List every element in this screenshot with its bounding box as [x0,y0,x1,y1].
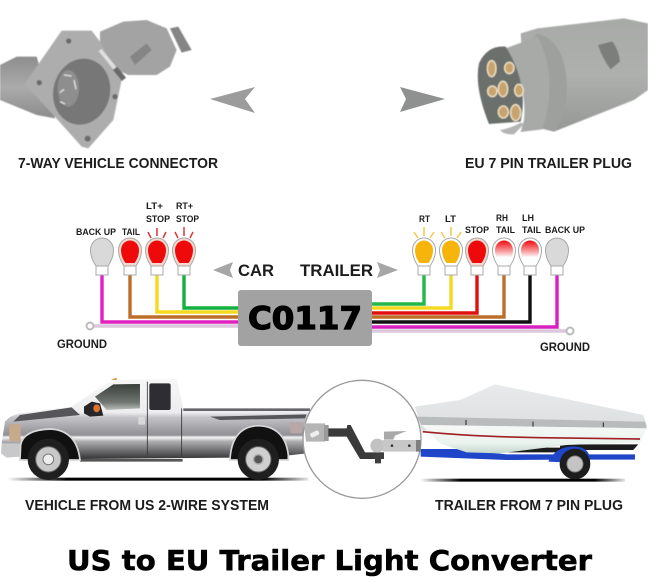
bulb labels: car: STOP [176,214,200,225]
trailer plug photo [478,18,648,134]
bulb: stop [466,238,488,275]
bulb: back up [546,238,568,275]
label: EU 7 pin trailer plug: EU 7 PIN TRAILER PLUG [465,155,632,172]
covered boat on trailer [415,384,647,482]
converter box C0117: C0117 [248,301,362,337]
wiring: car side [86,275,238,330]
bulb labels: trailer: LH [522,213,534,224]
left arrow [210,87,255,113]
caption: trailer: TRAILER FROM 7 PIN PLUG [435,497,623,514]
trailer bulbs [412,238,568,275]
vehicle connector photo [0,20,192,148]
pickup truck [1,378,310,481]
TRAILER arrow [377,262,398,278]
bulb: left tail [518,238,542,275]
TRAILER label: TRAILER [300,261,373,280]
bulb labels: trailer: TAIL [522,225,541,236]
bulb labels: trailer: RH [496,213,508,224]
bulb labels: car: LT+ [146,201,163,212]
bulb: right turn and stop [172,238,196,275]
red bulb rays [148,227,193,238]
CAR arrow [213,262,233,278]
bulb labels: trailer: RT [419,214,430,225]
bulb labels: trailer: TAIL [496,225,515,236]
caption: vehicle: VEHICLE FROM US 2-WIRE SYSTEM [25,497,269,514]
converter box C0117 [238,290,372,346]
bulb labels: trailer: BACK UP [545,225,586,236]
car bulbs [90,238,196,275]
amber bulb rays [414,227,461,238]
wiring: trailer side [372,275,574,334]
bulb: left turn and stop [146,238,168,275]
label: 7-way vehicle connector: 7-WAY VEHICLE CONNECTOR [18,155,218,172]
bulb: right turn [412,238,436,275]
ground label left: GROUND [57,337,107,351]
bulb labels: trailer: STOP [465,225,490,236]
bulb labels: car: STOP [146,214,171,225]
title: US to EU Trailer Light Converter [67,544,592,577]
bulb: left turn [440,238,462,275]
bulb labels: car [76,201,200,238]
hitch detail circle [303,380,421,498]
right arrow [400,87,445,112]
bulb labels: car: BACK UP [76,227,117,238]
ground label right: GROUND [540,340,590,354]
bulb labels: trailer [419,213,586,236]
bulb labels: car: RT+ [176,201,193,212]
CAR label: CAR [238,261,274,280]
bulb labels: trailer: LT [445,214,456,225]
bulb: back up [90,238,114,275]
bulb: right tail [492,238,516,275]
bulb labels: car: TAIL [122,227,140,238]
bulb: tail [118,238,142,275]
